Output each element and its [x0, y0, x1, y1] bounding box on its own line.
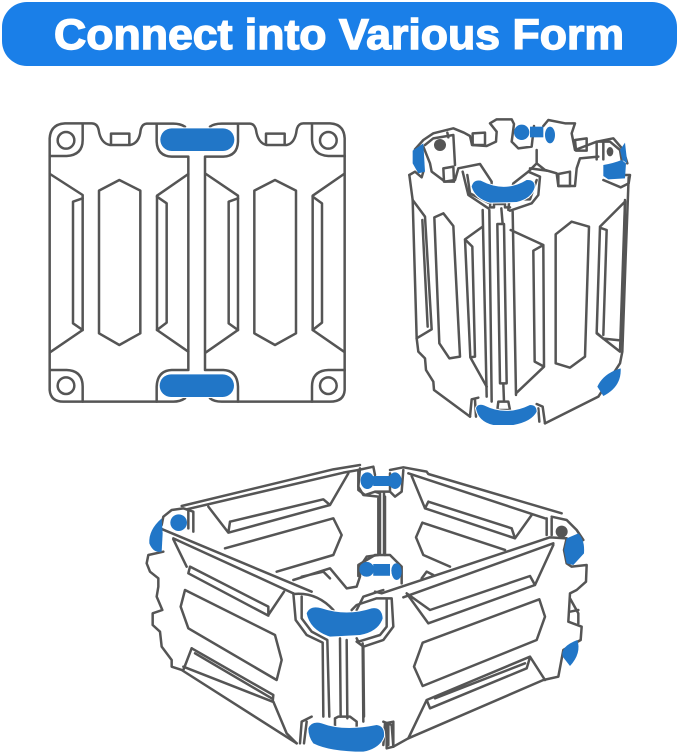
box left back panel: [162, 465, 385, 588]
blue connector top: [160, 128, 234, 151]
right flat panel: [205, 123, 345, 402]
left flat panel: [50, 123, 188, 402]
blue rim connectors: [413, 125, 627, 179]
box form right half: [352, 467, 587, 748]
blue front bottom connector: [308, 723, 384, 752]
blue front top connector: [472, 180, 535, 203]
box right back panel: [358, 467, 583, 583]
box right front panel: [352, 537, 587, 748]
blue corner clips: [359, 472, 584, 666]
blue front bottom connector: [476, 405, 537, 425]
header banner: [2, 2, 677, 66]
cylinder top rim: [409, 119, 630, 211]
box left front panel: [147, 528, 393, 747]
box form left half: [147, 465, 401, 752]
blue right clip: [597, 368, 621, 396]
blue connector bottom: [160, 374, 234, 397]
blue corner clips: [149, 472, 401, 578]
cylinder outline: [409, 175, 629, 423]
title: Connect into Various Form: [54, 11, 624, 59]
flat connected panels: [50, 123, 345, 402]
blue front top connector: [307, 607, 383, 637]
folded cylinder form: [409, 119, 630, 425]
